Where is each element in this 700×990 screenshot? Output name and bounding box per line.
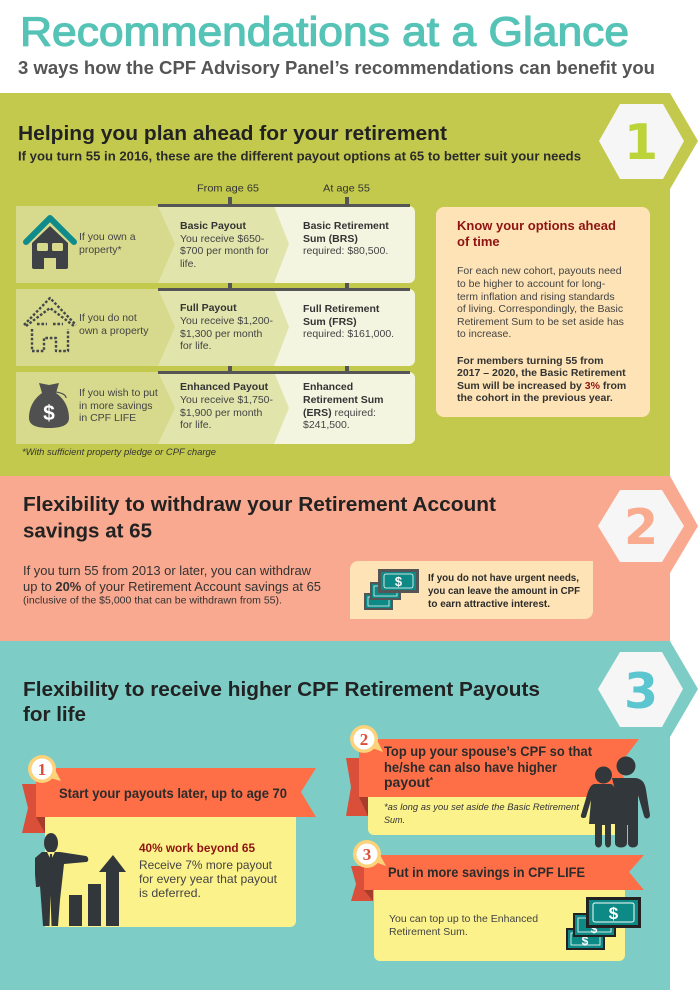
text: enhanced retirement sum: [303, 381, 384, 431]
text: 40% work beyond 65: is deferred.: [139, 886, 201, 900]
text: section 1 intro: If you turn 55 in 2016, these are the different payout options at 65 to better suit your needs: [18, 150, 581, 164]
text: enhanced top up: [389, 913, 538, 938]
ribbon text: [384, 743, 592, 790]
callout: leave amount in CPF: If you do not have urgent needs,: [428, 572, 579, 584]
card: start payouts later: [22, 755, 316, 927]
text: basic payout: $700 per month for: [180, 245, 269, 257]
ribbon text: Top up your spouse’s CPF so that: [384, 743, 592, 759]
text: basic retirement sum: required: $80,500.: [303, 245, 388, 257]
text: section 2 body: If you turn 55 from 2013 or later, you can withdraw: [23, 563, 312, 578]
text: basic payout: You receive $650-: [180, 233, 265, 245]
text: full retirement sum: Sum (FRS): [303, 316, 357, 328]
heading: section 3: [23, 679, 540, 726]
callout: leave amount in CPF: to earn attractive interest.: [428, 598, 550, 610]
text: no property: [79, 312, 149, 337]
callout: leave amount in CPF: [350, 561, 593, 619]
icon: businessman with rising bars: [35, 833, 126, 926]
text: section 2 body: up to 20% of your Retirement Account savings at 65: [23, 579, 321, 594]
card: top up spouse: [346, 725, 650, 848]
heading: section 2: Flexibility to withdraw your Retirement Account: [23, 494, 496, 516]
callout: know your options: For members turning 55 from: [457, 355, 603, 367]
text: enhanced retirement sum: (ERS) required:: [303, 407, 376, 419]
callout: know your options: For each new cohort, payouts need: [457, 265, 622, 277]
text: full payout: You receive $1,200-: [180, 315, 274, 327]
text: more savings: If you wish to put: [79, 387, 158, 399]
text: more savings: [79, 387, 158, 424]
ribbon text: he/she can also have higher: [384, 759, 557, 775]
ribbon: [346, 739, 639, 816]
column headers: [197, 182, 370, 194]
panel: section 1 retirement planning: [0, 93, 698, 476]
text: enhanced top up: You can top up to the Enhanced: [389, 913, 538, 925]
ribbon text: payout: [384, 774, 430, 790]
icon: couple: [581, 756, 650, 848]
callout: leave amount in CPF: you can leave the amount in CPF: [428, 585, 581, 597]
text: section 2 body: [23, 563, 321, 606]
footnote: *With sufficient property pledge or CPF charge: [22, 447, 216, 457]
callout: know your options: to increase.: [457, 328, 511, 340]
title: Recommendations at a Glance: [20, 8, 629, 54]
badge: number 1: [28, 755, 61, 783]
panel: section 3 higher payouts: [0, 641, 698, 990]
text: own a property: [79, 231, 136, 256]
ribbon: [22, 768, 316, 833]
icon: house: [26, 218, 74, 269]
text: full retirement sum: required: $161,000.: [303, 328, 394, 340]
text: full retirement sum: [303, 303, 394, 340]
ribbon text: Start your payouts later, up to age 70: [59, 785, 287, 801]
icon: cash stack: $: [609, 904, 619, 923]
text: enhanced payout: [180, 381, 274, 431]
icon: hexagon number 2: 2: [624, 499, 658, 556]
table row: no property: [16, 283, 415, 366]
ribbon: [351, 855, 644, 901]
icon: dashed house: [24, 298, 76, 351]
text: 40% work beyond 65: [139, 843, 278, 900]
panel: section 2 withdrawal flexibility: [0, 476, 698, 641]
badge: number 3: 3: [363, 845, 371, 864]
callout: know your options: of time: [457, 234, 500, 249]
text: 40% work beyond 65: for every year that payout: [139, 872, 278, 886]
ribbon text: Put in more savings in CPF LIFE: [388, 864, 585, 880]
heading: section 3: for life: [23, 704, 86, 726]
text: own a property: property*: [79, 244, 122, 256]
footnote: spouse: *as long as you set aside the Basic Retirement: [384, 802, 580, 812]
heading: section 2: savings at 65: [23, 520, 152, 542]
text: enhanced top up: Retirement Sum.: [389, 926, 468, 938]
text: basic payout: Basic Payout: [180, 220, 246, 232]
callout: know your options: Sum will be increased by 3% from: [457, 380, 626, 392]
footnote: spouse: Sum.: [384, 815, 405, 825]
badge: number 2: 2: [360, 730, 368, 749]
text: enhanced payout: Enhanced Payout: [180, 381, 269, 393]
icon: money bag: $: [43, 402, 55, 425]
column headers: From age 65: [197, 182, 259, 194]
text: basic retirement sum: [303, 220, 389, 257]
callout: know your options: term inflation and rising standards: [457, 291, 615, 303]
text: 40% work beyond 65: Receive 7% more payout: [139, 858, 273, 872]
card: more savings in CPF LIFE: [351, 840, 644, 961]
badge: number 1: 1: [38, 760, 46, 779]
icon: hexagon number 2: [598, 490, 684, 562]
text: full payout: [180, 302, 274, 352]
icon: hexagon number 1: 1: [624, 114, 658, 171]
text: more savings: in CPF LIFE: [79, 412, 136, 424]
callout: know your options: 2017 – 2020, the Basic Retirement: [457, 367, 626, 379]
text: basic retirement sum: Sum (BRS): [303, 233, 358, 245]
icon: cash stack: $: [395, 574, 403, 589]
callout: know your options: [436, 207, 650, 417]
callout: know your options: to be higher to account for long-: [457, 278, 606, 290]
callout: know your options: of living. Correspondingly, the Basic: [457, 303, 623, 315]
ribbon text: *: [430, 776, 434, 785]
text: enhanced retirement sum: Retirement Sum: [303, 394, 384, 406]
text: enhanced retirement sum: $241,500.: [303, 419, 350, 431]
text: more savings: in more savings: [79, 400, 153, 412]
heading: section 2: [23, 494, 496, 542]
footnote: spouse: [384, 802, 580, 825]
text: basic payout: life.: [180, 258, 196, 270]
text: enhanced payout: $1,900 per month: [180, 407, 262, 419]
text: section 2 body: (inclusive of the $5,000 that can be withdrawn from 55).: [23, 594, 282, 606]
text: full payout: Full Payout: [180, 302, 237, 314]
table row: more savings: [16, 366, 415, 444]
icon: cash stack: [364, 569, 419, 610]
icon: hexagon number 3: [598, 652, 683, 727]
text: enhanced retirement sum: Enhanced: [303, 381, 353, 393]
icon: cash stack: $: [591, 922, 598, 936]
callout: know your options: the cohort in the previous year.: [457, 392, 613, 404]
callout: know your options: Retirement Sum to be set aside has: [457, 316, 624, 328]
text: full payout: $1,300 per month: [180, 328, 262, 340]
icon: cash stack: $: [582, 934, 589, 948]
badge: number 2: [350, 725, 383, 753]
heading: section 3: Flexibility to receive higher CPF Retirement Payouts: [23, 679, 540, 701]
text: full retirement sum: Full Retirement: [303, 303, 380, 315]
text: no property: If you do not: [79, 312, 137, 324]
column headers: At age 55: [323, 182, 370, 194]
text: enhanced payout: for life.: [180, 419, 212, 431]
badge: number 3: [353, 840, 386, 868]
icon: cash stack: [566, 897, 641, 950]
icon: money bag: [29, 383, 69, 428]
text: own a property: If you own a: [79, 231, 136, 243]
text: basic retirement sum: Basic Retirement: [303, 220, 389, 232]
icon: hexagon number 3: 3: [624, 663, 658, 720]
table row: own a property: [16, 197, 415, 283]
text: full payout: for life.: [180, 340, 212, 352]
text: enhanced payout: You receive $1,750-: [180, 394, 274, 406]
text: 40% work beyond 65: 40% work beyond 65: [139, 843, 256, 855]
heading: section 1: Helping you plan ahead for your retirement: [18, 123, 447, 145]
subtitle: 3 ways how the CPF Advisory Panel’s recommendations can benefit you: [18, 58, 655, 78]
icon: hexagon number 1: [599, 104, 684, 179]
text: no property: own a property: [79, 325, 149, 337]
callout: know your options: Know your options ahead: [457, 218, 616, 233]
text: basic payout: [180, 220, 269, 270]
